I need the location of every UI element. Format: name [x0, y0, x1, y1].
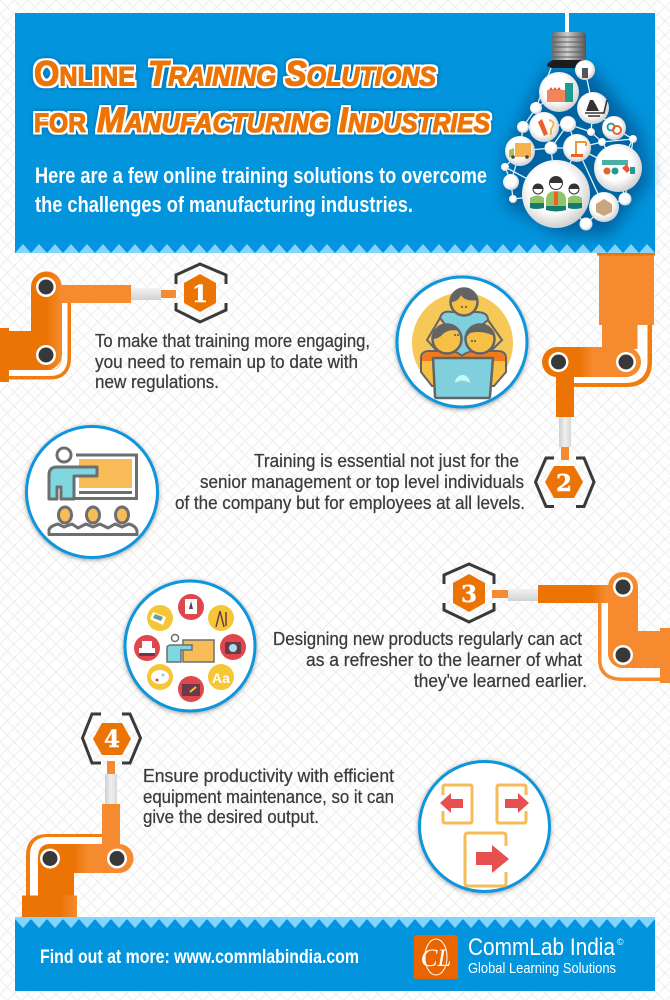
- arm 2: [542, 253, 655, 460]
- badge 4: 4: [104, 726, 120, 753]
- icon circle: doors and arrows: [420, 762, 550, 892]
- panel: footer: [15, 917, 655, 991]
- text block 2: senior management or top level individuals: [200, 472, 524, 492]
- arm 1: [0, 272, 176, 382]
- text block 1: [95, 331, 370, 392]
- text block 3: as a refresher to the learner of what: [306, 650, 582, 670]
- footer link text: Find out at more: www.commlabindia.com: [40, 947, 359, 968]
- text block 4: Ensure productivity with efficient: [143, 766, 394, 786]
- text block 2: [175, 451, 525, 513]
- title: INDUSTRIES: [339, 101, 490, 140]
- badge 1: 1: [192, 281, 208, 308]
- badge 2: 2: [556, 470, 572, 497]
- text block 3: [273, 629, 587, 691]
- subtitle: Here are a few online training solutions to overcome: [35, 163, 487, 188]
- text block 2: of the company but for employees at all levels.: [175, 493, 525, 513]
- text block 4: equipment maintenance, so it can: [143, 787, 394, 807]
- arm 3: [492, 572, 670, 683]
- text block 2: Training is essential not just for the: [254, 451, 519, 471]
- icon circle: team at laptop: [397, 277, 527, 407]
- title: TRAINING: [148, 54, 276, 94]
- title: ONLINE: [34, 54, 135, 94]
- logo: CommLab India: [414, 934, 624, 979]
- title: FOR: [34, 108, 86, 138]
- text block 4: give the desired output.: [143, 807, 319, 827]
- badge 3: [444, 564, 494, 622]
- badge 3: 3: [461, 581, 477, 608]
- logo: CommLab India: CommLab India: [468, 934, 616, 961]
- arm 4: [22, 761, 134, 918]
- text block 1: To make that training more engaging,: [95, 331, 370, 351]
- subtitle: the challenges of manufacturing industries.: [35, 192, 413, 217]
- badge 2: [536, 458, 594, 506]
- text block 1: you need to remain up to date with: [95, 352, 358, 372]
- logo: CommLab India: CL: [421, 945, 451, 972]
- badge 1: [176, 264, 226, 322]
- panel: header banner: [15, 13, 655, 253]
- title: SOLUTIONS: [285, 54, 436, 94]
- subtitle: [35, 163, 487, 217]
- logo: CommLab India: Global Learning Solutions: [468, 961, 616, 977]
- text block 4: [143, 766, 394, 827]
- title: MANUFACTURING: [97, 101, 329, 140]
- text block 3: they've learned earlier.: [414, 671, 587, 691]
- icon circle: product design tools: [125, 581, 255, 711]
- icon circle: trainer and audience: [26, 426, 158, 558]
- icon circle: product design tools: Aa: [212, 670, 230, 686]
- title: [34, 54, 490, 140]
- icon: network light bulb: [501, 13, 650, 235]
- badge 4: [82, 714, 140, 763]
- text block 3: Designing new products regularly can act: [273, 629, 582, 649]
- text block 1: new regulations.: [95, 372, 219, 392]
- logo: CommLab India: ©: [617, 937, 624, 947]
